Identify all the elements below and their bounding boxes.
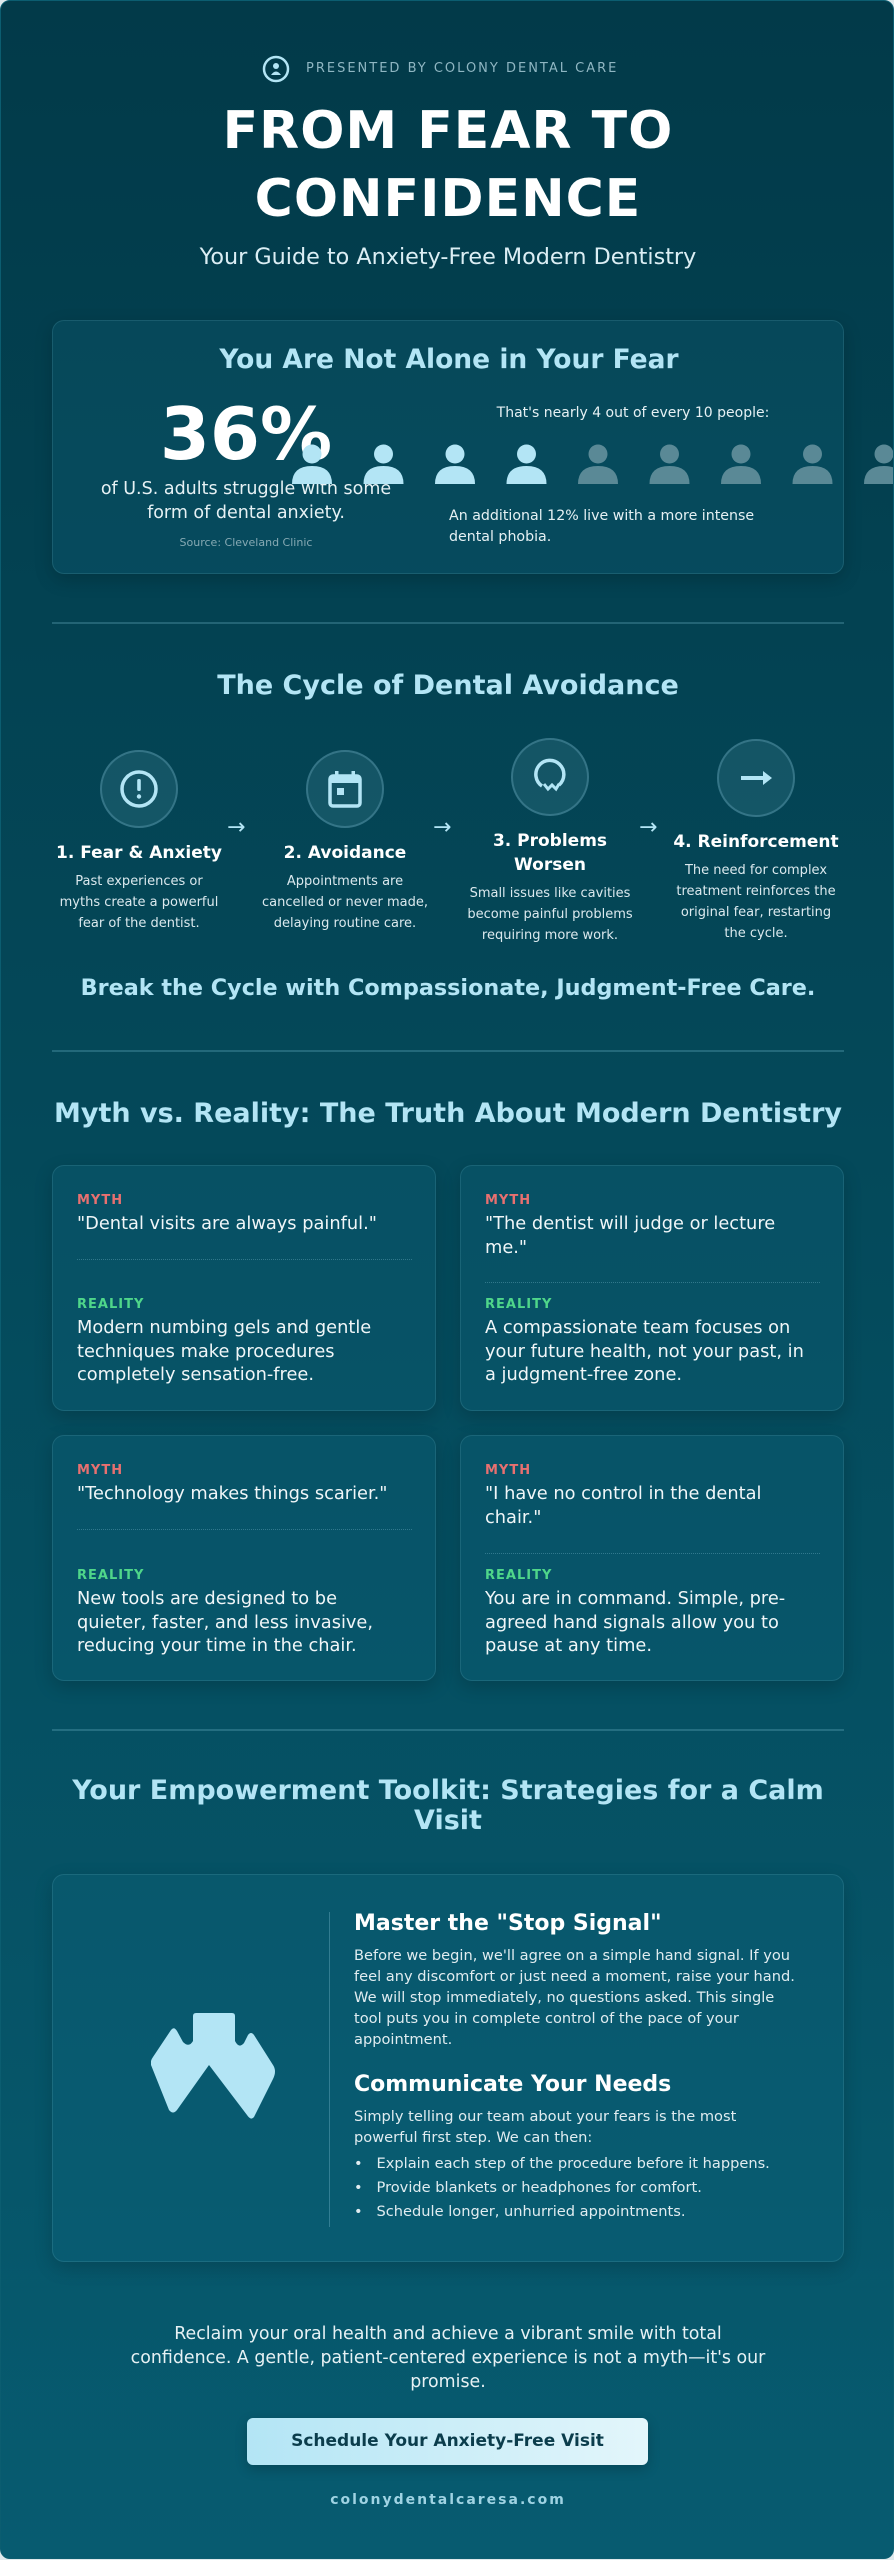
closing text: Reclaim your oral health and achieve a vibrant smile with total bbox=[174, 2324, 722, 2344]
title: FROM FEAR TO bbox=[223, 101, 673, 161]
text: stop signal: Master the "Stop Signal" bbox=[354, 1911, 662, 1936]
callout: break the cycle: Break the Cycle with Compassionate, Judgment-Free Care. bbox=[81, 975, 815, 1001]
header: presented by bbox=[262, 56, 618, 82]
step 1: 1. Fear & Anxiety bbox=[56, 843, 222, 863]
subtitle: Your Guide to Anxiety-Free Modern Dentistry bbox=[200, 244, 696, 270]
panel: myth 4: "I have no control in the dental chair." bbox=[485, 1483, 761, 1528]
button: schedule bbox=[247, 2418, 648, 2465]
panel: myth 4: MYTH bbox=[485, 1463, 531, 1478]
panel: toolkit bbox=[52, 1874, 844, 2262]
text: communicate: Simply telling our team about your fears is the most bbox=[354, 2108, 736, 2125]
stat description bbox=[101, 479, 391, 523]
text: stop signal: feel any discomfort or just need a moment, raise your hand. bbox=[354, 1968, 795, 1985]
heading: cycle: The Cycle of Dental Avoidance bbox=[217, 670, 679, 701]
step 2 bbox=[262, 750, 428, 931]
arrow 3: → bbox=[639, 815, 657, 840]
step 3: Small issues like cavities become painful problems requiring more work. bbox=[467, 886, 633, 943]
stat description: of U.S. adults struggle with some bbox=[101, 479, 391, 499]
step 2: 2. Avoidance bbox=[284, 843, 406, 863]
text: stop signal: appointment. bbox=[354, 2031, 452, 2048]
icon: logo circle bbox=[262, 56, 290, 82]
icon: stop hand bbox=[151, 2013, 275, 2119]
panel: myth 4 bbox=[460, 1435, 844, 1681]
panel: myth 3: "Technology makes things scarier." bbox=[77, 1483, 387, 1504]
people caption: That's nearly 4 out of every 10 people: bbox=[497, 405, 769, 421]
panel: myth 3 bbox=[52, 1435, 436, 1681]
title: CONFIDENCE bbox=[255, 169, 641, 229]
text: stop signal: tool puts you in complete control of the pace of your bbox=[354, 2010, 739, 2027]
panel: myth 3: New tools are designed to be quieter, faster, and less invasive, reducing your time in the chair. bbox=[77, 1588, 373, 1656]
icon: exclamation bbox=[100, 750, 178, 828]
closing text: confidence. A gentle, patient-centered experience is not a myth—it's our bbox=[131, 2348, 765, 2368]
heading: toolkit: Your Empowerment Toolkit: Strategies for a Calm Visit bbox=[72, 1775, 824, 1836]
panel: myth 1: REALITY bbox=[77, 1297, 144, 1312]
text: communicate bbox=[354, 2072, 770, 2220]
step 4: 4. Reinforcement bbox=[673, 832, 839, 852]
panel: myth 2: "The dentist will judge or lecture me." bbox=[485, 1213, 775, 1258]
presented text: PRESENTED BY COLONY DENTAL CARE bbox=[306, 61, 618, 76]
icon: cycle bbox=[511, 738, 589, 816]
source: Source: Cleveland Clinic bbox=[180, 536, 312, 549]
closing text: promise. bbox=[410, 2372, 486, 2392]
step 1: Past experiences or myths create a powerful fear of the dentist. bbox=[60, 874, 218, 931]
step 2: Appointments are cancelled or never made, delaying routine care. bbox=[262, 874, 428, 931]
text: stop signal: We will stop immediately, no questions asked. This single bbox=[354, 1989, 774, 2006]
text: communicate: • Schedule longer, unhurried appointments. bbox=[354, 2203, 686, 2220]
step 4: The need for complex treatment reinforces the original fear, restarting the cycle. bbox=[676, 863, 836, 941]
panel: myth 1: Modern numbing gels and gentle techniques make procedures completely sensation-free. bbox=[77, 1317, 371, 1385]
button: schedule: Schedule Your Anxiety-Free Visit bbox=[291, 2431, 604, 2451]
text: communicate: powerful first step. We can then: bbox=[354, 2129, 592, 2146]
step 3 bbox=[467, 738, 633, 943]
text: communicate: • Provide blankets or headphones for comfort. bbox=[354, 2179, 702, 2196]
heading: myth vs reality: Myth vs. Reality: The Truth About Modern Dentistry bbox=[54, 1098, 842, 1129]
step 1 bbox=[56, 750, 222, 931]
panel: myth 1 bbox=[52, 1165, 436, 1411]
footer url: colonydentalcaresa.com bbox=[330, 2492, 566, 2508]
big number 36%: 36% bbox=[160, 392, 332, 476]
panel: statistics bbox=[52, 320, 844, 574]
panel: myth 2: A compassionate team focuses on your future health, not your past, in a judgment-free zone. bbox=[485, 1317, 804, 1385]
panel: myth 2: REALITY bbox=[485, 1297, 552, 1312]
chart: people icons bbox=[292, 444, 893, 484]
step 3: 3. Problems Worsen bbox=[493, 831, 607, 875]
text: communicate: • Explain each step of the procedure before it happens. bbox=[354, 2155, 770, 2172]
arrow 1: → bbox=[227, 815, 245, 840]
panel: cycle steps bbox=[56, 738, 839, 943]
phobia note: An additional 12% live with a more intense dental phobia. bbox=[449, 508, 754, 545]
panel: myth 2: MYTH bbox=[485, 1193, 531, 1208]
panel: myth 1: MYTH bbox=[77, 1193, 123, 1208]
text: communicate: Communicate Your Needs bbox=[354, 2072, 671, 2097]
panel: myth 1: "Dental visits are always painful." bbox=[77, 1213, 377, 1234]
text: stop signal: Before we begin, we'll agree on a simple hand signal. If you bbox=[354, 1947, 790, 1964]
icon: calendar bbox=[306, 750, 384, 828]
closing text bbox=[131, 2324, 766, 2392]
panel: myth 4: You are in command. Simple, pre-agreed hand signals allow you to pause at any time. bbox=[485, 1588, 785, 1656]
step 4 bbox=[673, 739, 839, 941]
panel: myth 3: MYTH bbox=[77, 1463, 123, 1478]
panel: myth 4: REALITY bbox=[485, 1568, 552, 1583]
stat description: form of dental anxiety. bbox=[147, 503, 345, 523]
title bbox=[223, 101, 673, 229]
text: stop signal bbox=[354, 1911, 795, 2048]
panel: myth 2 bbox=[460, 1165, 844, 1411]
icon: right arrow bbox=[717, 739, 795, 817]
arrow 2: → bbox=[433, 815, 451, 840]
panel: myth 3: REALITY bbox=[77, 1568, 144, 1583]
stats heading: You Are Not Alone in Your Fear bbox=[219, 344, 679, 375]
